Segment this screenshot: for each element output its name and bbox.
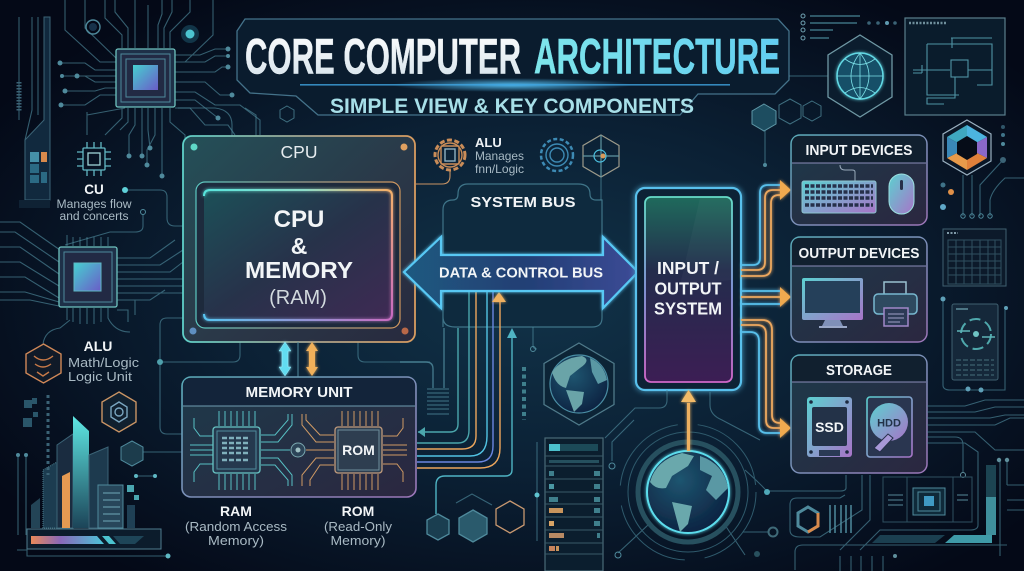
text: CPU and memory: MEMORY xyxy=(245,257,353,283)
left side strip xyxy=(19,17,50,208)
text: RAM label: Memory) xyxy=(208,533,264,548)
icon: printer xyxy=(874,282,917,326)
chip: ROM xyxy=(335,427,382,473)
connector: io to input devices xyxy=(741,180,791,276)
chip: left xyxy=(59,247,117,307)
icon: small globe xyxy=(544,343,614,425)
text: input output: INPUT / xyxy=(657,258,719,278)
connector: CU to CPU xyxy=(65,187,183,245)
connector dots lower right xyxy=(754,458,1009,558)
connector node xyxy=(157,359,163,365)
chip: RAM xyxy=(213,427,260,473)
text: CU: and concerts xyxy=(60,211,129,223)
text: ALU left: ALU xyxy=(84,338,112,354)
icon: HDD: HDD xyxy=(877,418,901,430)
circuit traces: left chip xyxy=(0,222,183,344)
icon: ALU hexagon xyxy=(26,344,61,383)
text: ALU top xyxy=(475,135,524,176)
text: RAM label: RAM xyxy=(220,503,252,519)
text: ALU top: Manages xyxy=(475,149,524,163)
connectors around lower globe xyxy=(605,390,760,555)
title text: CORE COMPUTER xyxy=(245,28,521,84)
icon: list lines xyxy=(801,14,897,40)
text: input output xyxy=(654,258,722,318)
title glow line xyxy=(300,78,730,92)
panel: CPU xyxy=(183,136,415,342)
panel: server rack xyxy=(545,438,603,571)
heading: storage: STORAGE xyxy=(826,362,892,379)
icon: small hexagon with connector xyxy=(121,441,183,466)
text: ALU top: ALU xyxy=(475,135,502,150)
text: CU xyxy=(56,182,132,223)
panel: radar xyxy=(940,296,1008,392)
text: CPU and memory: & xyxy=(291,233,307,259)
text: ALU top: fnn/Logic xyxy=(475,162,524,176)
text: ALU left xyxy=(68,338,140,384)
heading: system bus: SYSTEM BUS xyxy=(470,194,576,211)
small hexagons bottom xyxy=(427,494,524,542)
icon: ALU gear xyxy=(435,140,465,170)
circuit dots: top-left chip xyxy=(58,20,234,178)
icon: globe hexagon xyxy=(828,35,892,117)
arrow head: orange up xyxy=(492,292,506,302)
text: CPU and memory xyxy=(245,206,353,309)
bus lines: memory to system bus xyxy=(400,291,512,514)
text: RAM label: (Random Access xyxy=(185,519,288,534)
connector: io to output devices xyxy=(741,287,791,307)
side rail xyxy=(534,442,540,541)
text: CU: Manages flow xyxy=(56,199,132,211)
circuit traces: top-left chip xyxy=(60,0,260,176)
panel: input devices xyxy=(791,135,927,225)
dotted column xyxy=(522,367,526,420)
text: ROM label xyxy=(324,503,393,548)
icon: keyboard xyxy=(802,165,876,213)
icon: mouse xyxy=(889,174,914,214)
panel: system bus xyxy=(443,184,602,327)
subtitle: SIMPLE VIEW & KEY COMPONENTS xyxy=(330,95,694,118)
icon: CU chip xyxy=(77,142,111,176)
panel: data grid xyxy=(943,229,1006,286)
title accent word: ARCHITECTURE xyxy=(534,28,780,84)
text: CPU and memory: (RAM) xyxy=(269,287,327,309)
text: ALU left: Logic Unit xyxy=(68,369,132,384)
connector: ALU to system bus xyxy=(416,170,450,184)
heading: output devices: OUTPUT DEVICES xyxy=(798,245,920,262)
title plate xyxy=(237,19,828,118)
icon: target hexagon xyxy=(583,135,619,177)
traces right of colour hexagon xyxy=(940,125,1024,218)
connector rings xyxy=(530,346,621,558)
icon: blue gear xyxy=(541,139,573,171)
arrow head: teal left xyxy=(418,427,425,437)
text: ROM label: (Read-Only xyxy=(324,519,393,534)
icon: lower hexagon and bars xyxy=(798,505,851,533)
heading: CPU: CPU xyxy=(281,142,317,162)
arrow: globe to io xyxy=(681,390,696,451)
icon: colour hexagon xyxy=(943,120,991,175)
icon: big globe xyxy=(620,424,756,560)
text: input output: OUTPUT xyxy=(654,278,722,298)
arrow head: teal up xyxy=(507,328,517,338)
arrow: data and control bus xyxy=(404,237,638,308)
traces: RAM xyxy=(190,411,292,490)
text: ROM label: Memory) xyxy=(330,533,386,548)
connector hex to bus xyxy=(600,177,602,200)
icon: monitor xyxy=(802,278,863,328)
arrow: CPU to memory orange xyxy=(306,342,318,376)
text: ROM label: ROM xyxy=(342,503,374,519)
text: bus label: DATA & CONTROL BUS xyxy=(439,266,603,282)
chip: lower right xyxy=(883,477,972,522)
neon panel xyxy=(204,190,392,320)
panel: storage xyxy=(791,355,927,473)
circuit traces: lower right xyxy=(743,400,1024,571)
traces: ROM xyxy=(302,411,407,490)
panel: memory unit xyxy=(182,377,416,497)
inner frame xyxy=(196,182,400,328)
panel: input output system xyxy=(636,188,741,390)
connectors around memory xyxy=(160,108,430,434)
bus stub xyxy=(533,327,537,349)
text: CPU and memory: CPU xyxy=(274,206,324,233)
icon: honeycomb hexagon xyxy=(102,392,136,432)
panel: blueprint xyxy=(905,18,1005,115)
chip: ROM: ROM xyxy=(342,442,375,458)
text: CU: CU xyxy=(84,182,104,197)
illustration: data city xyxy=(16,395,170,558)
text: ALU left: Math/Logic xyxy=(68,355,140,370)
heading: memory unit: MEMORY UNIT xyxy=(246,384,352,401)
chip: top xyxy=(116,49,175,107)
illustration: lower right bar xyxy=(872,465,996,543)
vent lines xyxy=(427,389,449,414)
icon: SSD: SSD xyxy=(815,419,844,435)
node xyxy=(291,443,305,457)
center line between arrows xyxy=(297,342,299,377)
small hexagon under title xyxy=(280,106,294,122)
small hexagons top right xyxy=(752,99,821,167)
text: input output: SYSTEM xyxy=(654,298,722,318)
panel: output devices xyxy=(791,237,927,342)
heading: input devices: INPUT DEVICES xyxy=(806,142,912,159)
text: RAM label xyxy=(185,503,288,548)
arrow: CPU to memory cyan xyxy=(279,342,291,376)
connector: io to storage xyxy=(741,320,791,438)
